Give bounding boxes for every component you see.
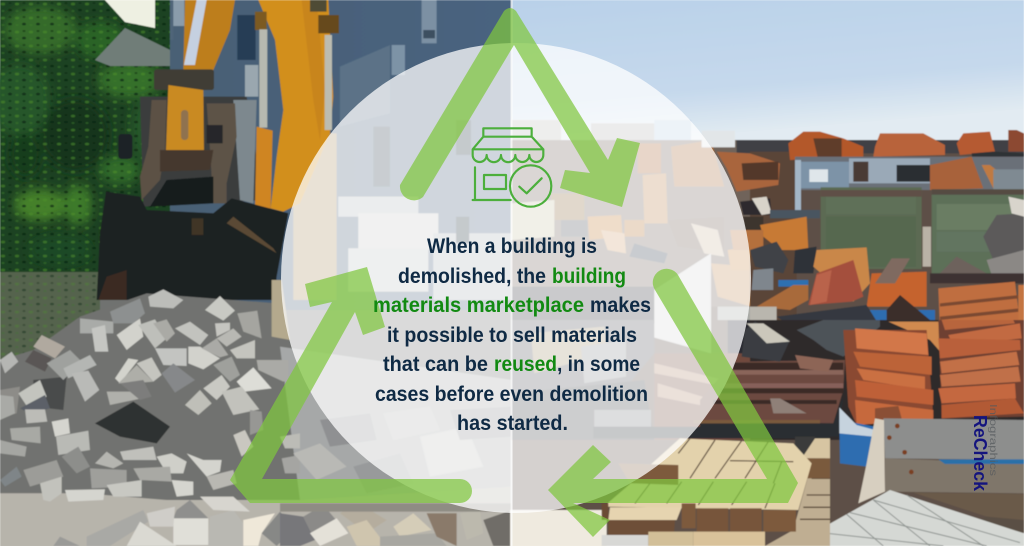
- text block: description: building: [552, 264, 626, 288]
- paver stacks: [510, 420, 830, 546]
- arrow: top, pointing down right: [400, 8, 640, 207]
- text block: description: When a building is: [427, 234, 597, 258]
- watermark: ReCheck Infographics: Infographics: [987, 404, 998, 476]
- photo: salvaged roof tiles and materials, right half: [510, 0, 1024, 546]
- translucent white circle panel: [281, 43, 751, 513]
- shop body and window: [473, 167, 511, 200]
- clutter behind the circle: [511, 120, 751, 440]
- gravel: [913, 493, 1024, 522]
- right tile pile: [983, 213, 1024, 260]
- tile stack A: [843, 330, 933, 425]
- frame: [140, 100, 167, 200]
- bottom strip of bricks: [280, 503, 512, 546]
- wooden crate: [883, 418, 1024, 460]
- yellow plate: [166, 85, 204, 152]
- cabin under the circle: [293, 120, 512, 300]
- grass with haze: [0, 272, 100, 362]
- awning: [473, 128, 543, 162]
- tile stack B: [938, 320, 1024, 418]
- coupler: [154, 69, 214, 90]
- blue box: [839, 420, 875, 467]
- text block: description: it possible to sell materials: [387, 323, 637, 347]
- dark backing behind the attachment: [140, 97, 263, 207]
- text block: description: has started.: [457, 411, 568, 435]
- icon: market stall with check mark: [473, 128, 551, 207]
- text block: description: materials marketplace: [373, 293, 584, 317]
- tree: [0, 0, 170, 290]
- check badge: [510, 165, 551, 207]
- arrow: bottom right, pointing left: [548, 269, 798, 537]
- rubble pile: [0, 280, 512, 546]
- text block: description: [373, 234, 651, 435]
- upper arm: [183, 0, 235, 70]
- dumpsters: [821, 187, 922, 269]
- sky and wall: [512, 0, 1024, 140]
- text block: description: reused: [494, 352, 557, 376]
- text block: description: cases before even demolition: [375, 382, 648, 406]
- boom: [258, 0, 333, 212]
- text block: description: demolished, the: [398, 264, 546, 288]
- orange tiles: [813, 247, 870, 302]
- recycling triangle of three arrows: [230, 8, 798, 537]
- building facade: [150, 0, 512, 310]
- bucket: [97, 192, 288, 300]
- watermark: ReCheck Infographics: [970, 404, 998, 492]
- watermark: ReCheck Infographics: ReCheck: [970, 415, 990, 492]
- seam between the two photos: [510, 0, 512, 546]
- photo: excavator demolishing a building, left half: [0, 0, 512, 546]
- excavator: [97, 0, 339, 300]
- text block: description: , in some: [557, 352, 640, 376]
- text block: description: that can be: [383, 352, 488, 376]
- arrow: left, pointing up right: [230, 267, 472, 503]
- text block: description: makes: [590, 293, 651, 317]
- grey pavement: [790, 490, 1024, 546]
